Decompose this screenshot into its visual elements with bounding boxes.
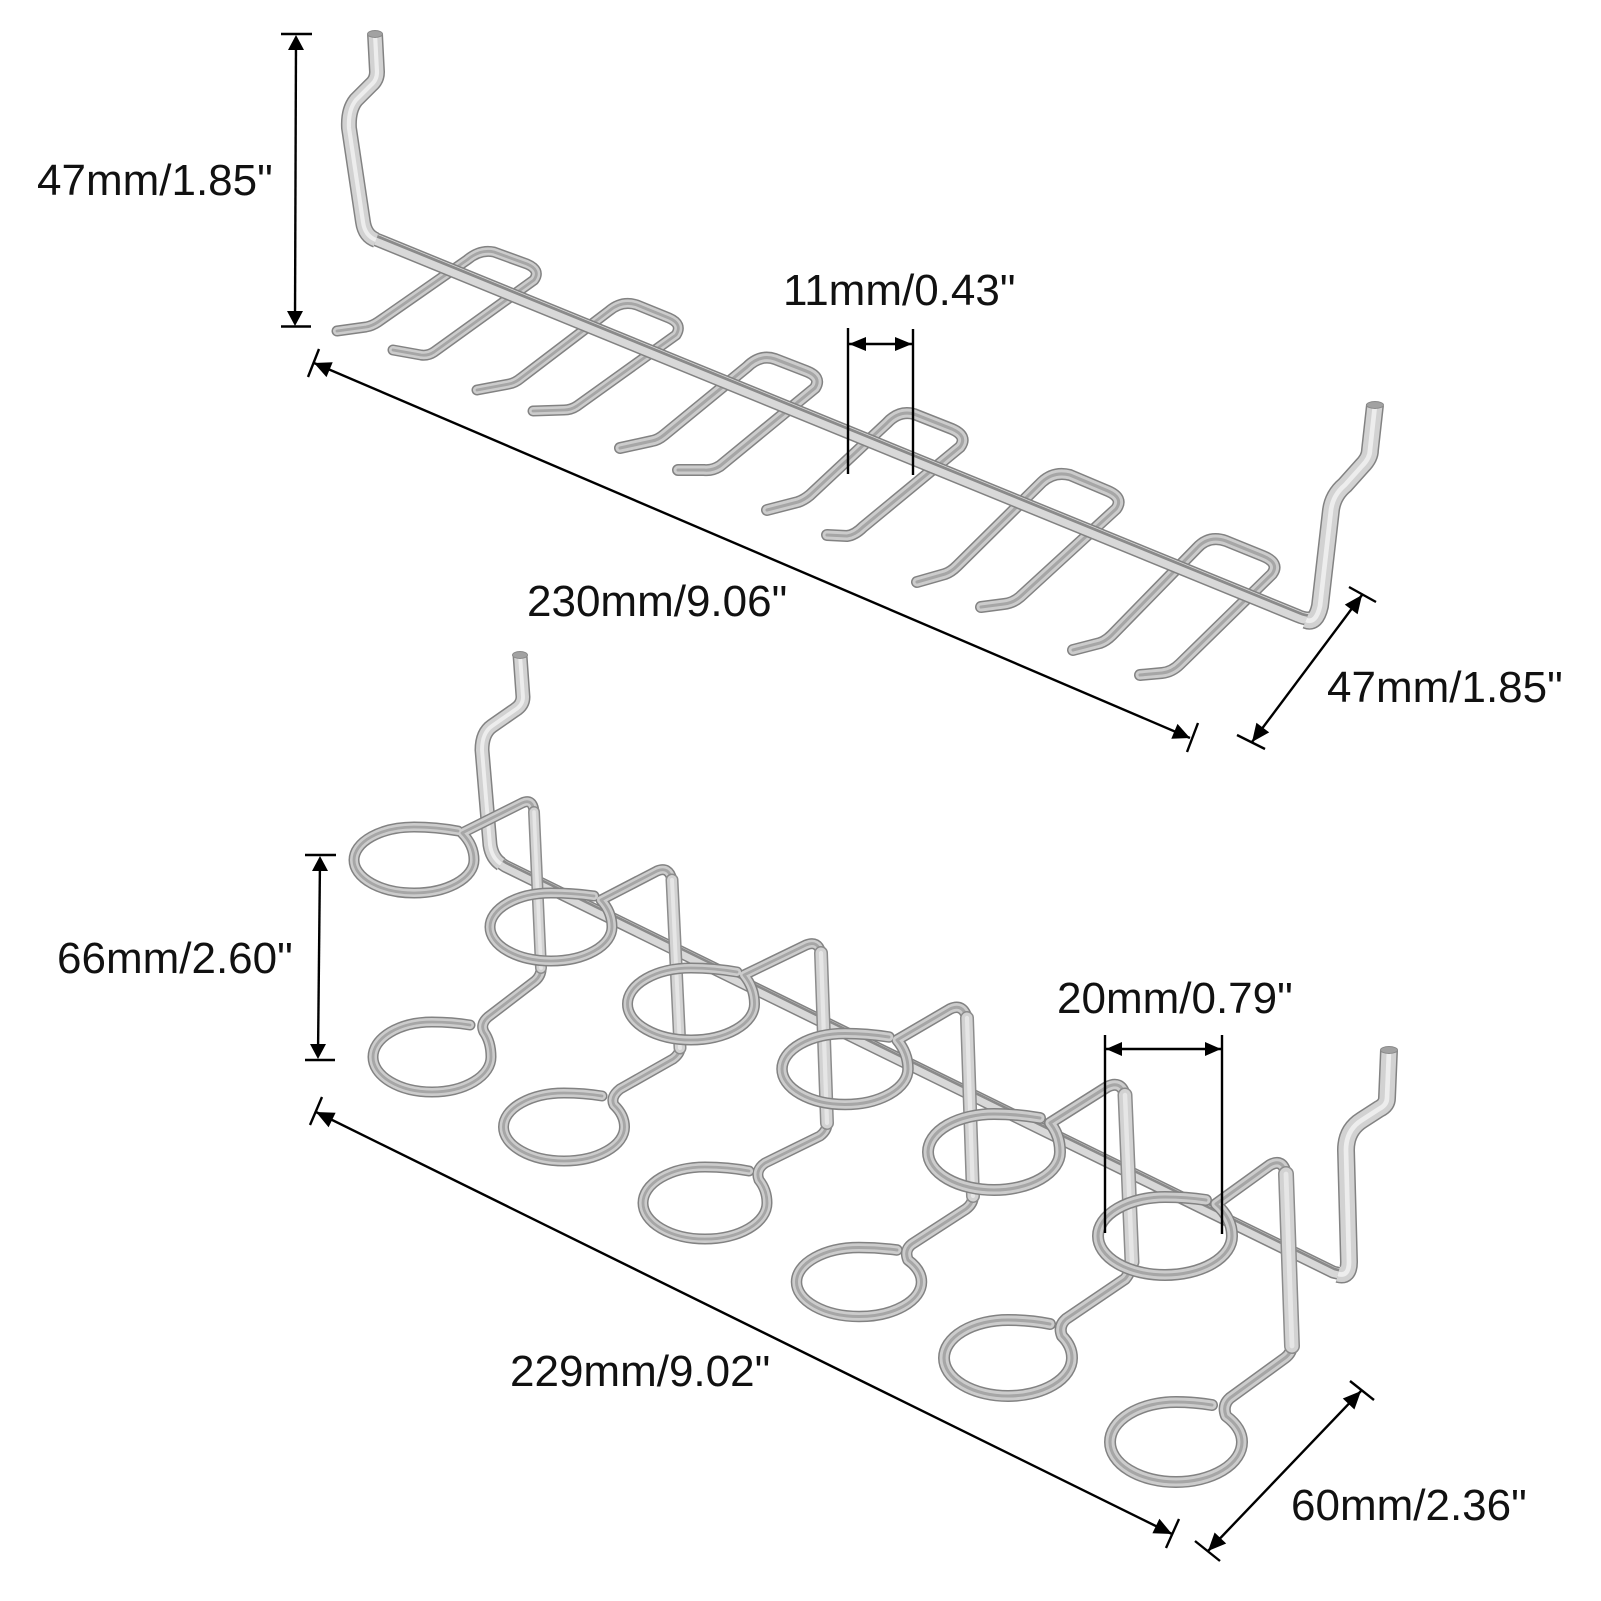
dimension: bottom rack depth 60mm: 60mm/2.36"	[1291, 1481, 1527, 1530]
dimension: bottom rack height 66mm	[57, 855, 336, 1060]
dimension: top rack length 230mm: 230mm/9.06"	[527, 577, 787, 626]
right upright	[1338, 1050, 1389, 1274]
dimension: top rack height 47mm	[37, 34, 312, 326]
main rail	[490, 842, 1350, 1273]
prong pair 3	[620, 358, 817, 470]
prong pair 6	[1073, 539, 1275, 675]
prong pair 1	[337, 251, 536, 355]
ring unit 1	[354, 802, 541, 1092]
main rail	[363, 219, 1321, 618]
right peg tip	[1380, 1046, 1398, 1054]
dimension: bottom rack depth 60mm	[1195, 1381, 1527, 1561]
ring unit 6	[1098, 1163, 1292, 1482]
dimension: top rack length 230mm	[308, 349, 1198, 752]
dimension: bottom rack length 229mm	[310, 1097, 1179, 1548]
bottom rack: ring pegboard hook	[354, 652, 1398, 1482]
left peg tip	[512, 652, 528, 658]
dimension: ring diameter 20mm: 20mm/0.79"	[1057, 974, 1293, 1023]
left upright	[349, 34, 377, 240]
left peg tip	[368, 30, 382, 38]
ring unit 4	[782, 1007, 973, 1316]
right peg tip	[1366, 402, 1384, 408]
dimension: top rack depth 47mm: 47mm/1.85"	[1327, 663, 1563, 712]
dimension: bottom rack height 66mm: 66mm/2.60"	[57, 934, 293, 983]
dimension: top rack height 47mm: 47mm/1.85"	[37, 156, 273, 205]
left upright	[482, 655, 523, 864]
dimension: ring diameter 20mm	[1057, 974, 1293, 1234]
ring unit 2	[490, 870, 680, 1161]
ring unit 5	[928, 1085, 1132, 1396]
prong pair 5	[917, 474, 1119, 607]
top rack: straight-prong pegboard hook	[337, 30, 1384, 675]
dimension: top prong spacing 11mm	[783, 266, 1015, 475]
ring unit 3	[628, 944, 827, 1239]
dimension: bottom rack length 229mm: 229mm/9.02"	[510, 1347, 770, 1396]
right upright	[1306, 405, 1375, 621]
prong pair 2	[477, 303, 678, 411]
dimension: top prong spacing 11mm: 11mm/0.43"	[783, 266, 1015, 315]
prong pair 4	[767, 413, 963, 536]
dimension: top rack depth 47mm	[1237, 587, 1563, 749]
